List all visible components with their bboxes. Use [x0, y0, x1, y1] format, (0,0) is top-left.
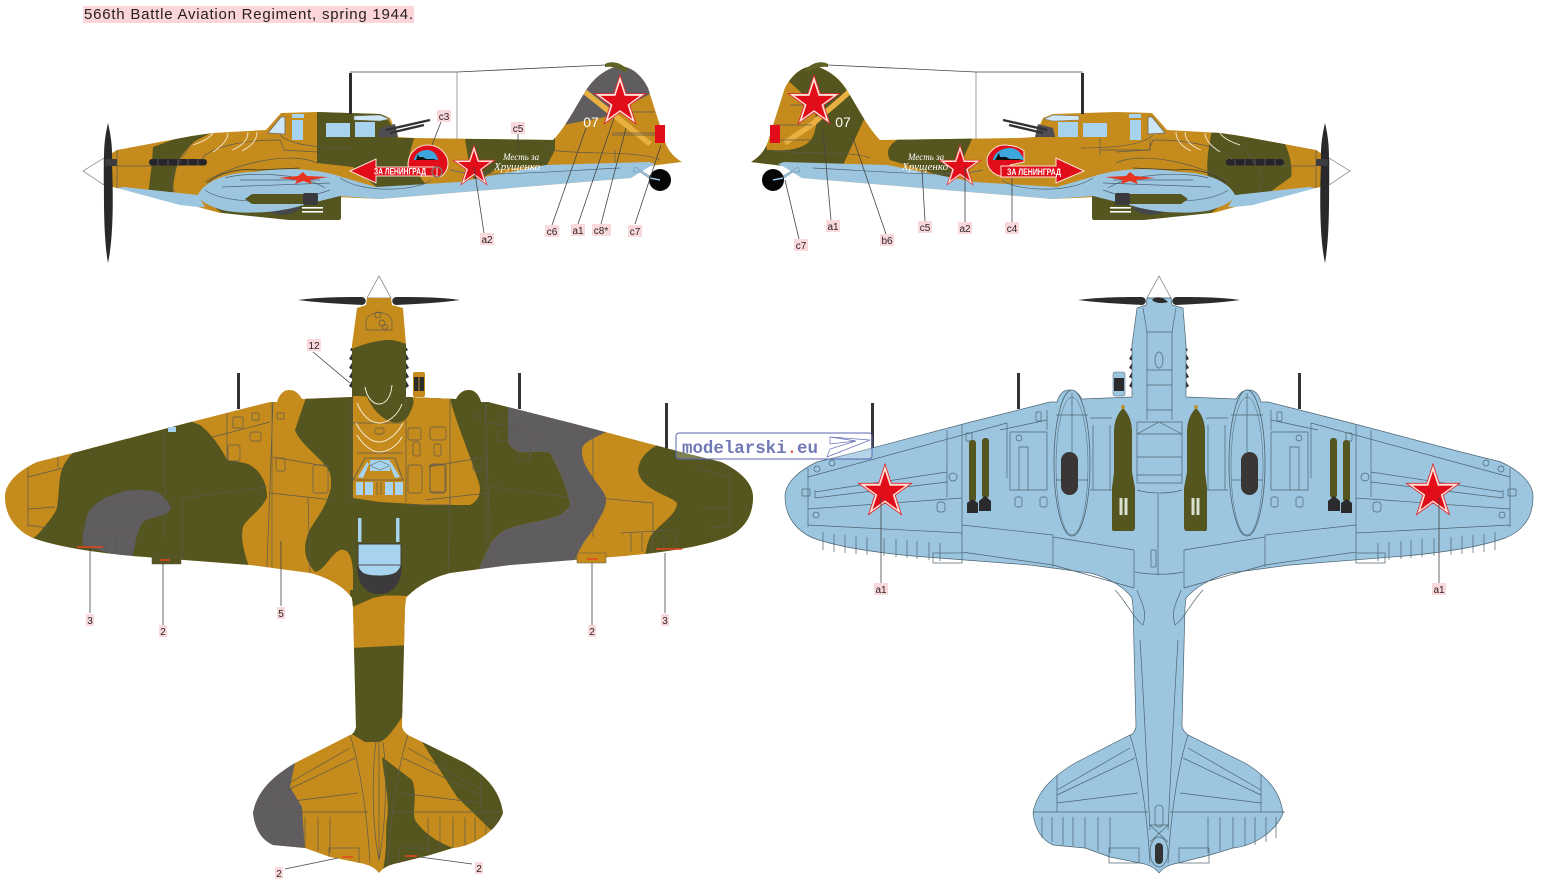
callouts: left profile: c7	[630, 227, 641, 238]
slogan arrow: ЗА ЛЕНИНГРАД	[374, 166, 426, 176]
callouts: top view: 2	[160, 627, 166, 638]
callouts: top view: 5	[278, 609, 284, 620]
callouts: bottom view	[874, 498, 1446, 596]
script inscription: Хрущенко	[493, 161, 541, 173]
callouts: top view: 2	[589, 627, 595, 638]
script inscription	[493, 152, 541, 173]
callouts: left profile: a1	[572, 226, 584, 237]
callouts: top view: 3	[662, 616, 668, 627]
airframe silhouette	[785, 298, 1533, 873]
script inscription: Хрущенко	[901, 161, 949, 173]
oil cooler	[1113, 372, 1125, 396]
script inscription	[901, 152, 949, 173]
fuselage panel lines	[1115, 308, 1203, 842]
oil cooler	[413, 372, 425, 397]
callouts: right profile: a2	[959, 224, 971, 235]
wing panel lines	[802, 410, 1134, 588]
callouts: right profile: a1	[827, 222, 839, 233]
callouts: left profile: a2	[481, 235, 493, 246]
rudder marking	[655, 125, 665, 143]
red stencils	[77, 547, 682, 857]
panel: top view	[5, 276, 770, 880]
fuselage star	[453, 145, 495, 185]
panel: bottom view	[785, 276, 1533, 873]
fuselage panel lines	[352, 312, 450, 860]
callouts: left profile	[432, 110, 661, 246]
callouts: right profile: b6	[881, 236, 893, 247]
wing panel lines	[28, 402, 333, 573]
spinner	[367, 276, 391, 298]
callouts: top view: 2	[476, 864, 482, 875]
tail panel lines	[1033, 735, 1150, 863]
camouflage: top view	[28, 312, 770, 870]
callouts: top view: 2	[276, 869, 282, 880]
propeller	[1078, 297, 1240, 305]
callouts: bottom view: a1	[1433, 585, 1445, 596]
panel: left side profile	[83, 60, 682, 263]
watermark	[676, 433, 872, 459]
callouts: top view: 3	[87, 616, 93, 627]
callouts: right profile: c5	[920, 223, 931, 234]
callouts: left profile: c6	[547, 227, 558, 238]
callouts: left profile: c3	[439, 112, 450, 123]
fuselage base colour	[104, 66, 682, 213]
camouflage: right profile	[745, 66, 1291, 200]
callouts: right profile: c4	[1007, 224, 1018, 235]
fuselage details, bomb, wing, prop	[83, 62, 671, 263]
spinner	[1147, 276, 1171, 298]
masts	[237, 373, 668, 449]
propeller	[298, 297, 460, 305]
slogan arrow	[1001, 158, 1084, 183]
fuselage details, bomb, wing, prop	[762, 62, 1350, 263]
camouflage: left profile	[148, 60, 660, 197]
slogan arrow	[350, 159, 442, 183]
fuselage base colour	[751, 66, 1329, 213]
script inscription: Месть за	[907, 152, 945, 162]
masts	[871, 373, 1301, 449]
weapons and undercarriage fairings: right	[1184, 390, 1352, 536]
tactical number: 07	[835, 114, 851, 130]
callouts: right profile: c7	[796, 241, 807, 252]
weapons and undercarriage fairings: left	[967, 390, 1135, 536]
rudder marking	[770, 125, 780, 143]
tail star	[788, 75, 840, 124]
tail panel lines	[253, 735, 370, 863]
star: left wing	[858, 464, 912, 515]
emblem	[408, 145, 448, 177]
exhaust stubs	[349, 343, 409, 390]
fuselage star	[939, 145, 981, 185]
callouts: bottom view: a1	[875, 585, 887, 596]
exhaust stubs	[1129, 343, 1189, 390]
cockpit glazing	[353, 458, 403, 594]
watermark: modelarski.eu	[682, 439, 818, 459]
airframe base colour	[5, 298, 753, 873]
script inscription: Месть за	[502, 152, 540, 162]
callouts: left profile: c5	[513, 124, 524, 135]
nose white arcs	[356, 385, 403, 452]
icon: paper plane	[827, 437, 870, 457]
panel: right side profile	[745, 62, 1350, 263]
callouts: left profile: c8*	[594, 226, 608, 237]
tactical number: 07	[583, 114, 599, 130]
star: right wing	[1406, 464, 1460, 515]
tail star	[594, 75, 646, 124]
tail wheel	[1155, 843, 1163, 864]
slogan arrow: ЗА ЛЕНИНГРАД	[1007, 167, 1061, 177]
title: 566th Battle Aviation Regiment, spring 1944.	[84, 6, 413, 23]
callouts: top view	[86, 339, 669, 880]
wing-tip blue light and tabs	[152, 427, 606, 564]
callouts: right profile	[785, 130, 1019, 252]
callouts: top view: 12	[308, 341, 320, 352]
emblem	[987, 145, 1024, 177]
